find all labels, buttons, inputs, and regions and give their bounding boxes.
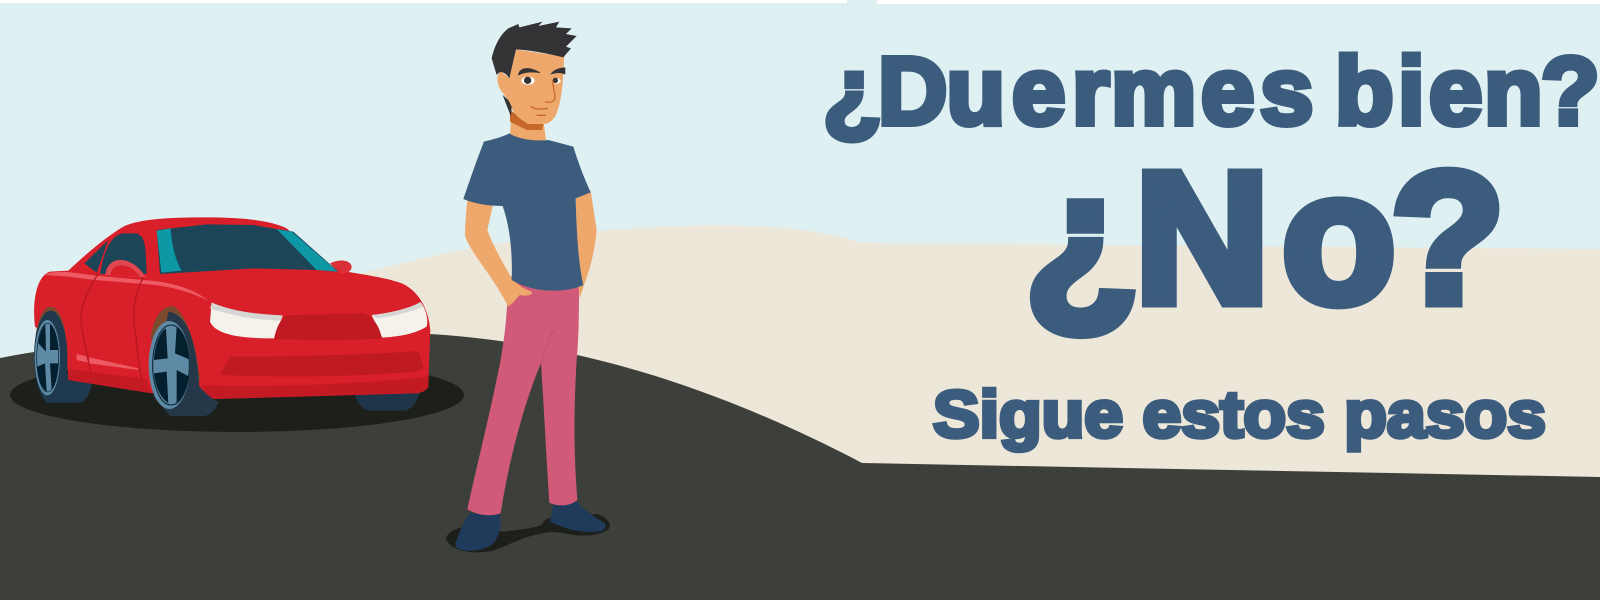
subheading: Sigue estos pasos: Sigue estos pasos bbox=[933, 377, 1546, 451]
rear side window bbox=[84, 240, 108, 273]
right headlight bbox=[372, 302, 427, 338]
body highlight bbox=[45, 272, 208, 301]
rear tyre bottom bbox=[43, 367, 92, 403]
foot shadow bbox=[446, 514, 610, 552]
lower sill and bumper shade bbox=[68, 369, 428, 399]
sand dune background bbox=[355, 226, 1600, 490]
neck bbox=[509, 113, 546, 141]
sill highlight bbox=[77, 354, 138, 370]
left arm bbox=[465, 200, 532, 307]
upper grille bbox=[274, 313, 382, 340]
icon: red car bbox=[10, 217, 464, 432]
left headlight bbox=[210, 303, 283, 338]
icon: standing man bbox=[446, 22, 610, 552]
rear wheel arch bbox=[35, 307, 67, 393]
rear mirror bbox=[330, 260, 352, 274]
windshield left reflection bbox=[157, 228, 182, 273]
heading: ¿Duermes bien?: ¿Duermes bien? bbox=[823, 38, 1600, 145]
trouser crease bbox=[541, 329, 555, 363]
road bbox=[0, 333, 1600, 600]
side window bbox=[100, 233, 147, 274]
far front tyre bbox=[354, 392, 421, 411]
trousers bbox=[467, 277, 579, 515]
face bbox=[497, 49, 564, 124]
door lines bbox=[81, 273, 143, 378]
nose and mouth bbox=[531, 80, 555, 115]
right arm bbox=[576, 191, 597, 298]
door mirror bbox=[105, 260, 146, 277]
rear wheel rim bbox=[35, 320, 60, 395]
heading: ¿No?: ¿No? bbox=[1025, 135, 1505, 342]
windshield right reflection bbox=[277, 229, 338, 272]
car body bbox=[34, 217, 430, 399]
front wheel arch bbox=[151, 306, 200, 393]
front wheel rim bbox=[149, 321, 190, 409]
shoes bbox=[455, 502, 605, 551]
eyebrows bbox=[518, 68, 565, 75]
windshield bbox=[157, 224, 338, 274]
hair bbox=[492, 22, 577, 117]
beard shadow bbox=[510, 110, 543, 130]
lower grille bbox=[220, 351, 424, 376]
T-shirt bbox=[463, 133, 591, 291]
car ground shadow bbox=[10, 358, 464, 432]
rear wheel tyre bbox=[34, 311, 67, 403]
eyes bbox=[521, 77, 535, 85]
